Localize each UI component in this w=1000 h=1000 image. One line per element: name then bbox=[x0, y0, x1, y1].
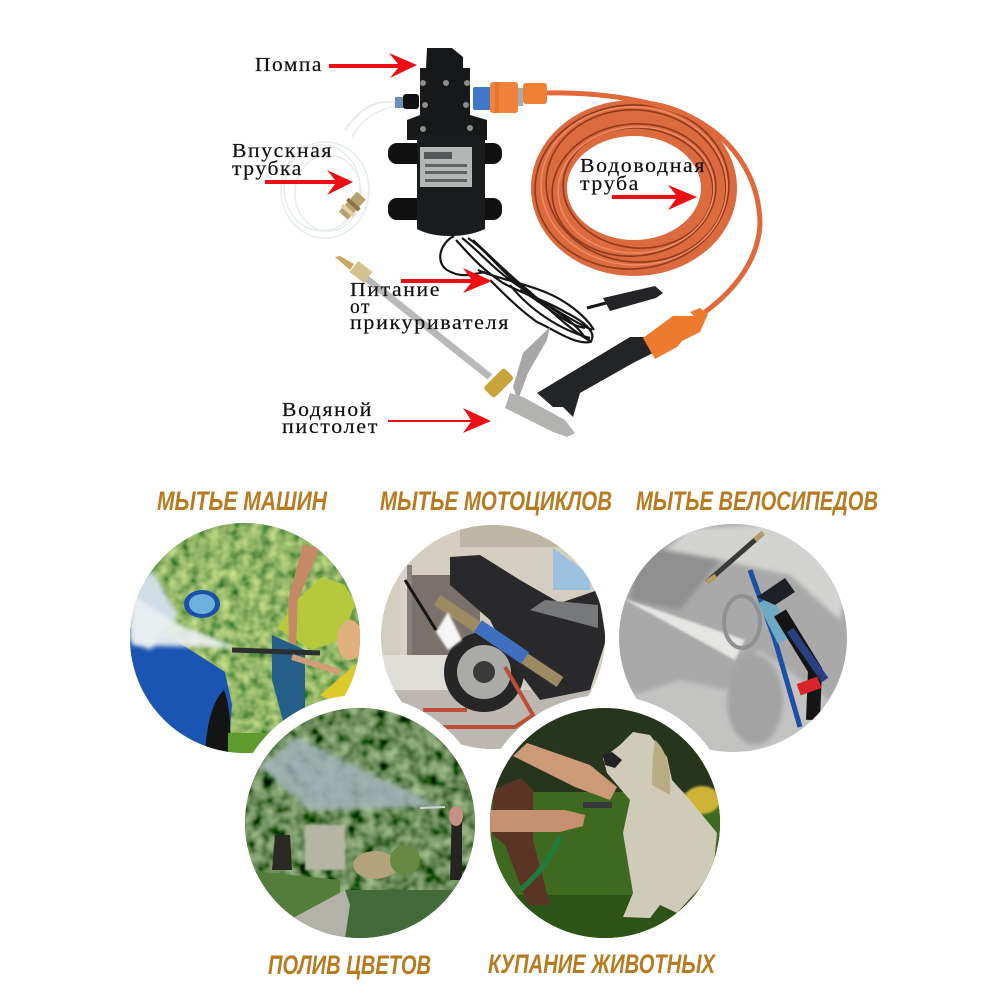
label: Впускная трубка bbox=[232, 140, 333, 180]
handle bbox=[537, 337, 653, 417]
arrow: hose bbox=[612, 185, 697, 210]
label: Впускная трубка: трубка bbox=[232, 158, 303, 180]
spray bbox=[436, 612, 462, 650]
arm bbox=[513, 743, 617, 800]
screws bbox=[420, 80, 473, 132]
label: Помпа: Помпа bbox=[255, 54, 323, 76]
cigarette plug bbox=[603, 286, 663, 311]
heading: bicycle wash: МЫТЬЕ ВЕЛОСИПЕДОВ bbox=[636, 486, 878, 516]
dog bbox=[603, 732, 717, 918]
car bbox=[130, 628, 232, 752]
label: Питание от прикуривателя: прикуривателя bbox=[350, 312, 510, 334]
tree trunk bbox=[272, 835, 292, 870]
label: Водоводная труба: труба bbox=[580, 173, 640, 195]
orange hose coil bbox=[530, 93, 760, 312]
outlet fittings bbox=[473, 82, 547, 113]
label: Питание от прикуривателя: Питание bbox=[350, 279, 441, 301]
bicycle bbox=[707, 533, 825, 727]
label: Питание от прикуривателя bbox=[350, 279, 510, 334]
label: Водоводная труба bbox=[580, 155, 706, 195]
arrow: power bbox=[401, 268, 492, 293]
label: Водяной пистолет: Водяной bbox=[282, 399, 373, 421]
paddock stand bbox=[423, 667, 533, 727]
brass fitting bbox=[337, 190, 367, 221]
brass ring bbox=[483, 367, 514, 399]
heading: flower watering: ПОЛИВ ЦВЕТОВ bbox=[268, 950, 431, 980]
spray bbox=[260, 737, 440, 810]
pump bbox=[388, 48, 547, 236]
inlet fitting bbox=[395, 94, 419, 109]
pressure lance bbox=[232, 650, 320, 653]
woman bbox=[277, 577, 355, 650]
hose and hand bbox=[450, 822, 462, 880]
lever bbox=[513, 327, 550, 400]
label: Водяной пистолет bbox=[282, 399, 379, 438]
spray gun bbox=[335, 256, 708, 437]
photo: flower watering bbox=[245, 708, 475, 938]
heading: pet bathing: КУПАНИЕ ЖИВОТНЫХ bbox=[488, 949, 716, 979]
white ring behind lower photos bbox=[232, 695, 488, 951]
power cable with plug bbox=[440, 236, 606, 342]
nozzle bbox=[583, 802, 612, 808]
intake tube coil bbox=[281, 102, 396, 238]
label: Питание от прикуривателя: от bbox=[350, 296, 371, 318]
pump head bbox=[407, 48, 487, 140]
label: Впускная трубка: Впускная bbox=[232, 140, 333, 162]
silver body bbox=[505, 393, 575, 437]
arrow: intake tube bbox=[265, 170, 353, 195]
arrow: pump bbox=[329, 53, 417, 78]
photo: pet bathing bbox=[490, 708, 720, 942]
heading: car wash: МЫТЬЕ МАШИН bbox=[157, 486, 327, 516]
bike body bbox=[450, 555, 606, 700]
building and rocks bbox=[305, 825, 345, 870]
lance bbox=[362, 275, 490, 377]
orange connector bbox=[643, 308, 708, 359]
spray bbox=[132, 595, 237, 648]
photo: car wash bbox=[120, 523, 363, 753]
person leg bbox=[493, 778, 550, 905]
photo: motorcycle wash bbox=[381, 525, 606, 749]
label bbox=[420, 147, 472, 187]
mounting ears bbox=[388, 143, 502, 164]
label: Водяной пистолет: пистолет bbox=[282, 416, 379, 438]
child bbox=[337, 620, 360, 660]
photo: bicycle wash bbox=[619, 524, 850, 760]
green hose bbox=[520, 837, 560, 890]
heading: motorcycle wash: МЫТЬЕ МОТОЦИКЛОВ bbox=[380, 486, 612, 516]
label: Водоводная труба: Водоводная bbox=[580, 155, 706, 177]
exhaust bbox=[437, 600, 560, 682]
hose lead from pump bbox=[545, 93, 760, 312]
wheel bbox=[444, 632, 524, 712]
water jet bbox=[622, 598, 745, 660]
motor body bbox=[417, 135, 485, 236]
arrow: gun bbox=[388, 408, 491, 433]
